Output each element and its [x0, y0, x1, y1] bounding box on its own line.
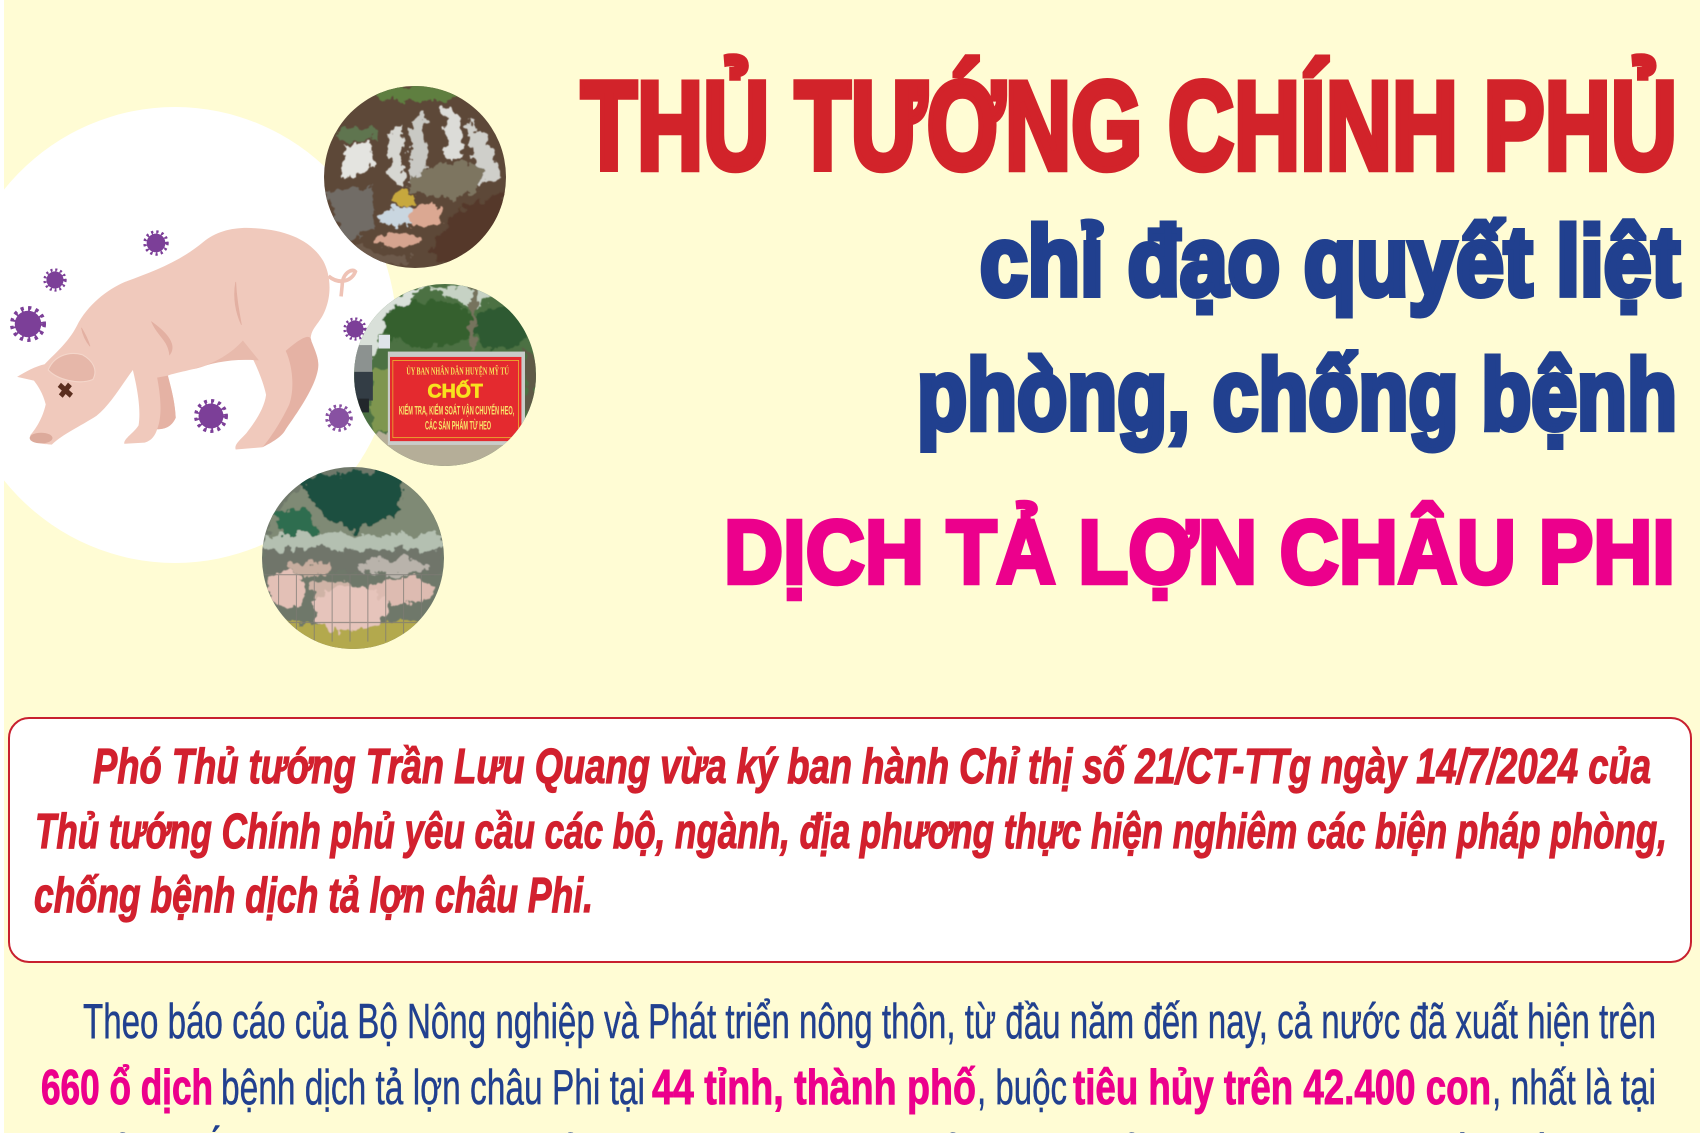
body line 2: , buộc — [977, 1061, 1067, 1115]
illustration: sick pig — [17, 228, 355, 450]
body line 2: bệnh dịch tả lợn châu Phi tại — [221, 1061, 645, 1115]
sign text: CÁC SẢN PHẨM TỪ HEO — [425, 419, 491, 433]
virus particles — [12, 231, 366, 431]
photo: pig farm barn — [262, 467, 444, 649]
body line 2 — [41, 1061, 1656, 1115]
sign text — [390, 357, 521, 441]
body line 2: 660 ổ dịch — [41, 1061, 213, 1115]
photo: red checkpoint sign — [354, 284, 536, 466]
callout line 3: chống bệnh dịch tả lợn châu Phi. — [34, 869, 593, 923]
sign text: KIỂM TRA, KIỂM SOÁT VẬN CHUYỂN HEO, — [399, 404, 514, 417]
panel: directive callout — [9, 718, 1691, 962]
body line 2: tiêu hủy trên 42.400 con — [1073, 1061, 1491, 1115]
sign text: ỦY BAN NHÂN DÂN HUYỆN MỸ TÚ — [406, 364, 509, 378]
body line 2: 44 tỉnh, thành phố — [652, 1061, 976, 1115]
sign text: CHỐT — [427, 380, 484, 402]
photo: buried pigs in limed pit — [324, 86, 506, 268]
body paragraph — [41, 995, 1656, 1133]
white circle backdrop — [0, 107, 397, 563]
